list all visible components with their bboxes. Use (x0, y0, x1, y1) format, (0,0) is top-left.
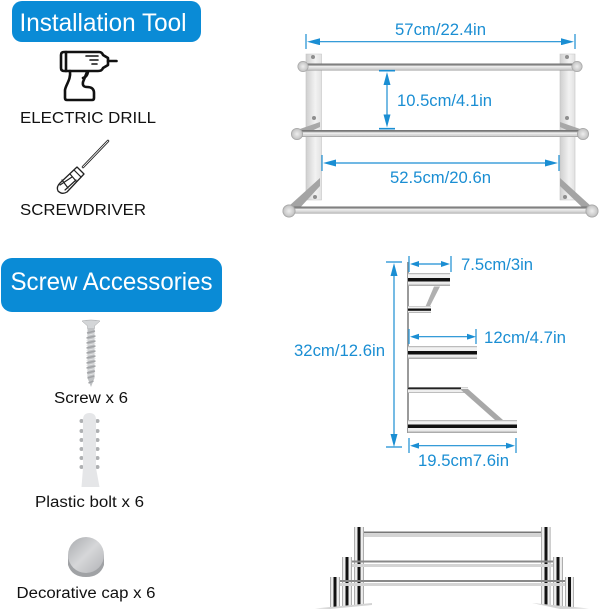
lower bracket (408, 387, 468, 393)
dimension: side view depth middle: 12cm/4.7in (484, 328, 566, 347)
dimension: side view depth bottom: 19.5cm7.6in (418, 451, 509, 470)
dimension: overall width (306, 20, 575, 49)
icon: screwdriver (57, 141, 108, 193)
dimension: overall width: 57cm/22.4in (395, 20, 486, 39)
heading: Installation Tool: Installation Tool (20, 9, 186, 37)
middle bar (408, 346, 477, 359)
right wall plate (560, 54, 575, 200)
label: decorative cap count: Decorative cap x 6 (16, 585, 156, 602)
icon: decorative cap (68, 537, 104, 577)
label: screw count: Screw x 6 (54, 390, 128, 407)
dimension: overall height: 32cm/12.6in (294, 341, 385, 360)
dimension: side view depth bottom (409, 438, 516, 470)
icon: electric drill (61, 52, 116, 100)
mid arms (297, 122, 320, 134)
rack perspective view (315, 527, 589, 609)
heading: Installation Tool (12, 1, 201, 42)
icon: screw (82, 320, 100, 387)
dimension: rail spacing: 10.5cm/4.1in (397, 91, 492, 110)
back tier (354, 527, 550, 605)
front tier (330, 577, 574, 608)
middle tier (342, 557, 563, 607)
wall line (407, 262, 409, 433)
low arms (289, 178, 320, 211)
bottom bar (408, 420, 517, 433)
dimension: overall height (294, 262, 402, 447)
icon: plastic bolt (80, 413, 100, 487)
rack front view (282, 54, 598, 218)
dimension: side view depth top (409, 255, 533, 274)
upper bracket (424, 286, 440, 310)
rack side view (407, 262, 517, 433)
bottom rail (292, 206, 588, 214)
dimension: side view depth top: 7.5cm/3in (461, 255, 533, 274)
label: plastic bolt count: Plastic bolt x 6 (35, 494, 144, 511)
middle rail (300, 130, 582, 137)
label: screwdriver: SCREWDRIVER (20, 202, 146, 219)
dimension: side view depth middle (409, 328, 566, 347)
dimension: rail spacing (379, 71, 492, 129)
label: electric drill: ELECTRIC DRILL (20, 110, 156, 127)
floor shadows (315, 603, 589, 609)
dimension: inner width (322, 155, 559, 187)
dimension: inner width: 52.5cm/20.6n (390, 168, 491, 187)
top rail (306, 64, 576, 70)
left wall plate (306, 54, 322, 200)
top bar (408, 273, 450, 286)
heading: Screw Accessories: Screw Accessories (10, 268, 212, 296)
heading: Screw Accessories (1, 258, 222, 312)
